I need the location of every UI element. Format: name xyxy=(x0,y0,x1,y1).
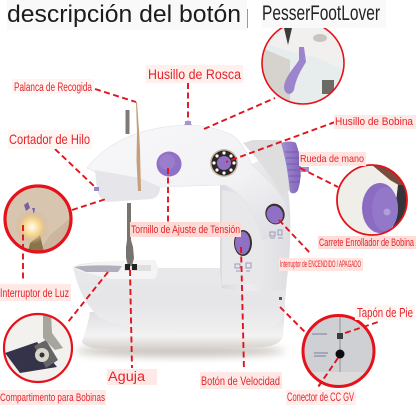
label: Conector de CC GV xyxy=(286,390,356,405)
label: Interruptor de ENCENDIDO / APAGADO xyxy=(279,258,363,271)
label: Botón de Velocidad xyxy=(200,372,282,389)
circle: DC socket and foot plug xyxy=(303,315,375,388)
label: Botón de Velocidad: Botón de Velocidad xyxy=(201,374,280,388)
side socket xyxy=(279,297,282,300)
head underside xyxy=(95,170,160,202)
label: Husillo de Rosca: Husillo de Rosca xyxy=(148,67,241,82)
hand wheel xyxy=(281,142,309,193)
label: Rueda de mano: Rueda de mano xyxy=(300,153,364,165)
needle assembly xyxy=(126,203,134,266)
tension knob xyxy=(156,152,182,176)
label: Palanca de Recogida xyxy=(12,79,94,94)
label: Tornillo de Ajuste de Tensión xyxy=(130,222,241,237)
machine head xyxy=(87,125,290,240)
callout lines xyxy=(23,83,378,387)
power switch knob xyxy=(262,200,288,228)
machine shadow xyxy=(75,345,285,357)
circle: bobbin winder spool xyxy=(337,165,407,235)
speed button xyxy=(234,230,252,256)
needle plate xyxy=(73,260,158,279)
title: descripción del botón xyxy=(7,1,241,28)
label: Conector de CC GV: Conector de CC GV xyxy=(287,392,354,404)
thread cutter xyxy=(94,187,99,191)
sewing machine xyxy=(73,102,309,357)
machine base body xyxy=(73,260,287,332)
column xyxy=(220,150,290,291)
bobbin winder pin xyxy=(184,120,192,125)
circle: light switch xyxy=(4,186,74,252)
label: Palanca de Recogida: Palanca de Recogida xyxy=(14,82,92,94)
circle: bobbin compartment xyxy=(4,313,74,383)
title divider xyxy=(247,9,248,28)
label: Cortador de Hilo: Cortador de Hilo xyxy=(9,131,90,147)
speed marks xyxy=(235,263,251,271)
take-up lever xyxy=(136,102,141,191)
circle: pickup lever detail xyxy=(262,22,344,104)
on off marks xyxy=(270,230,283,238)
brand backdrop xyxy=(262,0,386,28)
label: Tornillo de Ajuste de Tensión: Tornillo de Ajuste de Tensión xyxy=(131,224,240,236)
thread post xyxy=(126,110,130,134)
label: Interruptor de Luz: Interruptor de Luz xyxy=(0,286,69,300)
label: Cortador de Hilo xyxy=(8,130,92,149)
stitch dial xyxy=(210,149,238,177)
repeated callout lines over insets xyxy=(23,225,360,387)
label: Compartimento para Bobinas xyxy=(0,390,106,405)
label: Compartimento para Bobinas: Compartimento para Bobinas xyxy=(0,392,105,404)
label: Aguja: Aguja xyxy=(108,369,146,384)
machine base foot xyxy=(82,305,285,349)
label: Interruptor de Luz xyxy=(0,284,71,301)
title backdrop xyxy=(7,0,247,30)
label: Aguja xyxy=(107,369,157,385)
header backdrop xyxy=(0,0,416,28)
